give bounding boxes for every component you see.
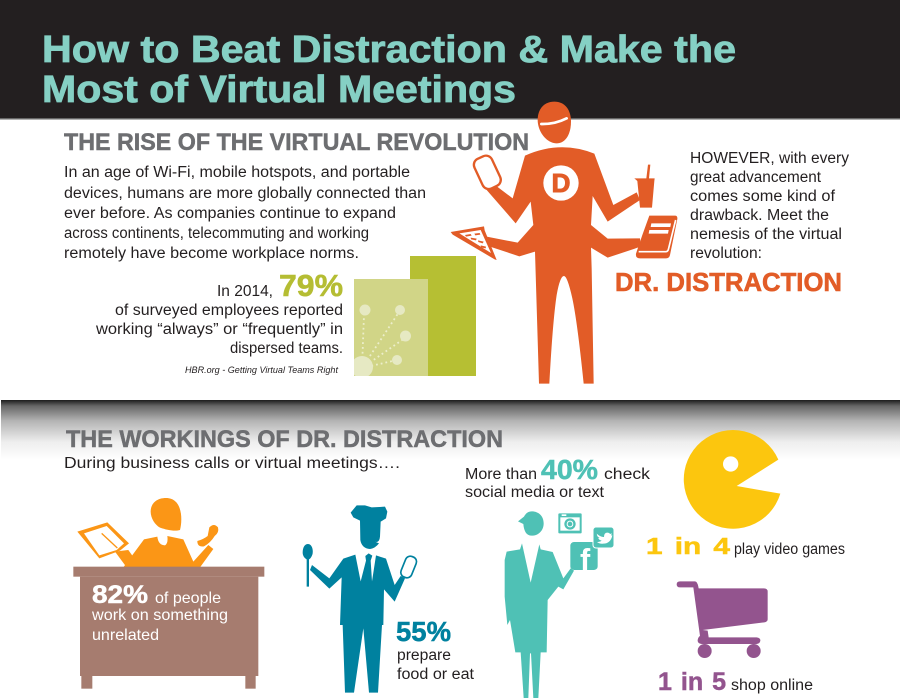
body bbox=[505, 543, 574, 698]
text block: however: drawback. Meet the bbox=[690, 207, 829, 224]
stat: 79 percent: 79% bbox=[279, 268, 343, 303]
desk bbox=[73, 567, 264, 689]
stat: 79 percent: of surveyed employees reported bbox=[115, 302, 343, 319]
text block: however: HOWEVER, with every bbox=[690, 150, 849, 167]
stat: 79 percent: In 2014, bbox=[217, 283, 273, 300]
chest badge bbox=[543, 165, 579, 201]
stat: 40 percent: check bbox=[604, 466, 650, 483]
stat: 82 percent: 82% bbox=[92, 581, 148, 609]
stat: 55 percent: prepare bbox=[397, 647, 451, 664]
stat: 55 percent bbox=[396, 616, 475, 683]
text: during business calls: During business calls or virtual meetings…. bbox=[64, 455, 400, 472]
stat: 1 in 5 bbox=[658, 668, 813, 696]
stat: 55 percent: food or eat bbox=[397, 666, 475, 683]
spoon bbox=[303, 544, 313, 587]
stat: 55 percent: 55% bbox=[396, 616, 451, 647]
icon: camera bbox=[558, 513, 582, 533]
icon: book bbox=[636, 216, 677, 258]
text block: intro: remotely have become workplace norms. bbox=[64, 245, 359, 262]
chest badge: D bbox=[552, 168, 570, 198]
figure: woman with book and phone bbox=[77, 498, 218, 567]
body bbox=[485, 147, 641, 384]
text block: however: nemesis of the virtual bbox=[690, 226, 842, 243]
chef hat and head bbox=[351, 505, 387, 549]
icon: pacman bbox=[684, 430, 780, 529]
stat: 79 percent: working “always” or “frequently” in bbox=[95, 321, 343, 338]
heading: Dr. Distraction: DR. DISTRACTION bbox=[615, 267, 842, 297]
figure: person with social icons bbox=[505, 511, 614, 698]
text block: however bbox=[690, 150, 849, 262]
stat: 40 percent: More than bbox=[465, 466, 537, 483]
icon: facebook bbox=[570, 542, 598, 577]
stat: 82 percent bbox=[91, 581, 228, 644]
text block: intro: In an age of Wi-Fi, mobile hotspots, and portable bbox=[64, 164, 410, 181]
figure: chef bbox=[303, 505, 418, 693]
head bbox=[538, 102, 571, 143]
header band bbox=[0, 0, 900, 120]
stat: 79 percent bbox=[95, 268, 343, 357]
stat: 82 percent: work on something bbox=[91, 607, 228, 624]
stat: 1 in 4 bbox=[646, 533, 845, 559]
icon: green network squares bbox=[351, 256, 476, 378]
stat: 82 percent: unrelated bbox=[92, 627, 159, 644]
text block: intro: ever before. As companies continue to expand bbox=[64, 205, 396, 222]
icon: phone bbox=[472, 153, 503, 191]
icon: twitter bbox=[593, 527, 614, 548]
stat: 79 percent: dispersed teams. bbox=[230, 340, 343, 357]
figure: Dr. Distraction bbox=[451, 102, 677, 384]
panel: 82 percent desk bbox=[73, 498, 264, 689]
heading: the workings of Dr. Distraction: THE WORKINGS OF DR. DISTRACTION bbox=[66, 426, 503, 453]
icon: cup bbox=[634, 165, 655, 208]
text block: however: revolution: bbox=[690, 245, 762, 262]
title bbox=[42, 29, 736, 111]
stat: 40 percent: social media or text bbox=[465, 484, 605, 501]
stat: 40 percent: 40% bbox=[541, 454, 598, 485]
title: How to Beat Distraction & Make the bbox=[42, 29, 736, 71]
stat: 1 in 5: 1 in 5 bbox=[658, 668, 726, 696]
source note: HBR.org - Getting Virtual Teams Right bbox=[185, 365, 338, 375]
icon: shopping cart bbox=[677, 581, 768, 658]
stat: 40 percent bbox=[465, 454, 650, 501]
text block: however: comes some kind of bbox=[690, 188, 836, 205]
title: Most of Virtual Meetings bbox=[42, 69, 516, 111]
text block: intro: devices, humans are more globally connected than bbox=[64, 185, 426, 202]
stat: 1 in 4: play video games bbox=[734, 541, 845, 558]
stat: 82 percent: of people bbox=[155, 590, 221, 607]
stat: 1 in 5: shop online bbox=[731, 677, 813, 694]
head bbox=[518, 511, 544, 536]
text block: intro: across continents, telecommuting and working bbox=[64, 225, 369, 242]
phone bbox=[399, 555, 418, 579]
text block: however: great advancement bbox=[690, 169, 822, 186]
section shadow bbox=[1, 400, 900, 460]
heading: the rise of the virtual revolution: THE RISE OF THE VIRTUAL REVOLUTION bbox=[64, 129, 529, 156]
text block: intro bbox=[64, 164, 426, 262]
suit bbox=[310, 553, 405, 693]
icon: pizza bbox=[451, 226, 497, 260]
icon: facebook: f bbox=[580, 543, 591, 577]
stat: 1 in 4: 1 in 4 bbox=[646, 533, 730, 559]
